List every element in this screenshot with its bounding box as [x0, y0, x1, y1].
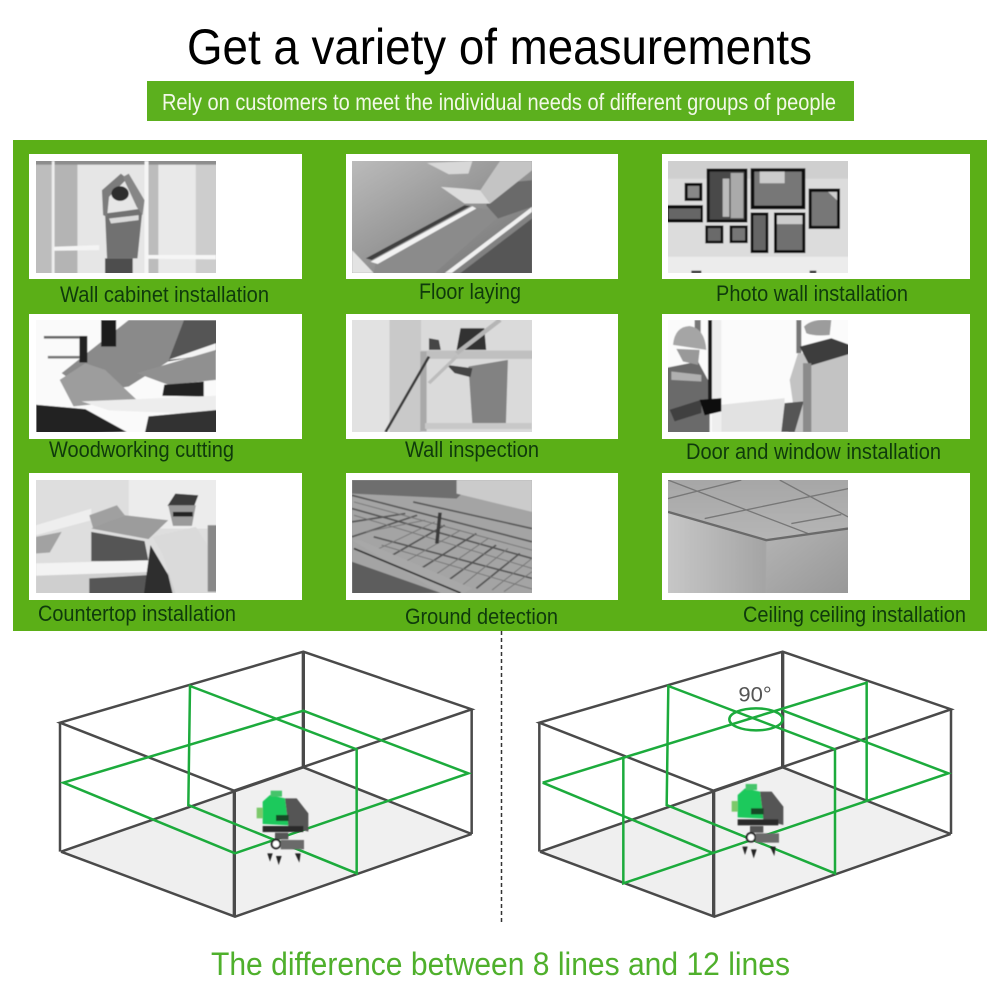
- card: ground detection: [346, 473, 618, 600]
- diagram: 12 lines room: [539, 652, 951, 917]
- divider: dashed center line: [500, 631, 502, 925]
- card: countertop installation: [29, 473, 302, 600]
- subtitle banner: Rely on customers to meet the individual needs of different groups of people: [162, 89, 836, 115]
- label: Ground detection: [405, 604, 558, 629]
- label: Countertop installation: [38, 601, 236, 626]
- title: Get a variety of measurements: [187, 19, 812, 75]
- label: Photo wall installation: [716, 281, 908, 306]
- icon: laser level: [732, 784, 783, 858]
- icon: laser level: [257, 791, 308, 865]
- card: wall cabinet installation: [29, 154, 302, 279]
- label: Ceiling ceiling installation: [743, 602, 966, 627]
- card: ceiling installation: [662, 473, 970, 600]
- caption: The difference between 8 lines and 12 lines: [211, 946, 790, 982]
- label: Wall cabinet installation: [60, 282, 269, 307]
- card: woodworking cutting: [29, 314, 302, 439]
- laser lines: [543, 683, 948, 883]
- label: Door and window installation: [686, 439, 941, 464]
- label: Floor laying: [419, 279, 521, 304]
- laser lines: [63, 686, 468, 873]
- card: wall inspection: [346, 314, 618, 439]
- diagram: 8 lines room: [60, 652, 472, 917]
- label: 90 degrees: 90°: [738, 682, 772, 706]
- card: floor laying: [346, 154, 618, 279]
- card: door and window installation: [662, 314, 970, 439]
- card: photo wall installation: [662, 154, 970, 279]
- label: Woodworking cutting: [49, 437, 234, 462]
- label: Wall inspection: [405, 437, 539, 462]
- subtitle banner: [147, 81, 854, 121]
- panel: applications grid: [13, 140, 987, 631]
